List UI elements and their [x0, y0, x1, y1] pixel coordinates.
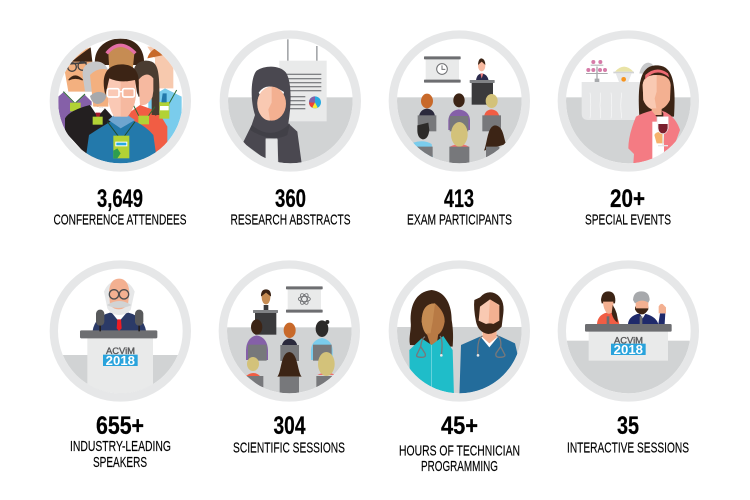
stat: research abstracts: 360: [275, 185, 306, 213]
stat: scientific sessions: 304: [274, 412, 306, 440]
icon: industry-leading speakers: ACViM: [106, 346, 135, 356]
stat: scientific sessions: SCIENTIFIC SESSIONS: [233, 440, 345, 456]
stat: conference attendees: 3,649: [97, 185, 143, 213]
icon: special events: [560, 34, 700, 171]
stat: conference attendees: CONFERENCE ATTENDEES: [54, 212, 186, 228]
icon: interactive sessions: [560, 264, 700, 401]
icon: scientific sessions: [223, 264, 357, 401]
stat: research abstracts: RESEARCH ABSTRACTS: [230, 212, 350, 228]
stat: special events: SPECIAL EVENTS: [585, 212, 671, 228]
stat: technician programming: 45+: [441, 412, 478, 440]
stat: interactive sessions: INTERACTIVE SESSIONS: [567, 440, 689, 456]
icon: industry-leading speakers: [53, 264, 187, 402]
stat: exam participants: EXAM PARTICIPANTS: [407, 212, 512, 228]
stat: technician programming: [399, 412, 520, 475]
icon: interactive sessions: ACViM: [614, 335, 643, 345]
icon: exam participants: [393, 34, 527, 171]
stat: special events: 20+: [610, 185, 645, 213]
stat: technician programming: HOURS OF TECHNICIAN: [399, 444, 520, 460]
icon: conference attendees: [54, 34, 187, 167]
stat: exam participants: [407, 185, 512, 228]
stat: interactive sessions: 35: [617, 412, 639, 440]
stat: industry-leading speakers: [70, 412, 171, 471]
stat: scientific sessions: [233, 412, 345, 456]
icon: interactive sessions: 2018: [614, 342, 643, 357]
stat: interactive sessions: [567, 412, 689, 456]
icon: research abstracts: [223, 34, 357, 171]
stat: industry-leading speakers: 655+: [96, 412, 144, 440]
stat: industry-leading speakers: INDUSTRY-LEADING: [70, 439, 171, 455]
stat: exam participants: 413: [444, 185, 474, 213]
stat: special events: [585, 185, 671, 228]
icon: industry-leading speakers: 2018: [106, 353, 135, 368]
stat: technician programming: PROGRAMMING: [421, 459, 498, 475]
icon: technician programming: [393, 264, 527, 400]
stat: industry-leading speakers: SPEAKERS: [93, 455, 147, 471]
stat: conference attendees: [54, 185, 186, 228]
stat: research abstracts: [230, 185, 350, 228]
